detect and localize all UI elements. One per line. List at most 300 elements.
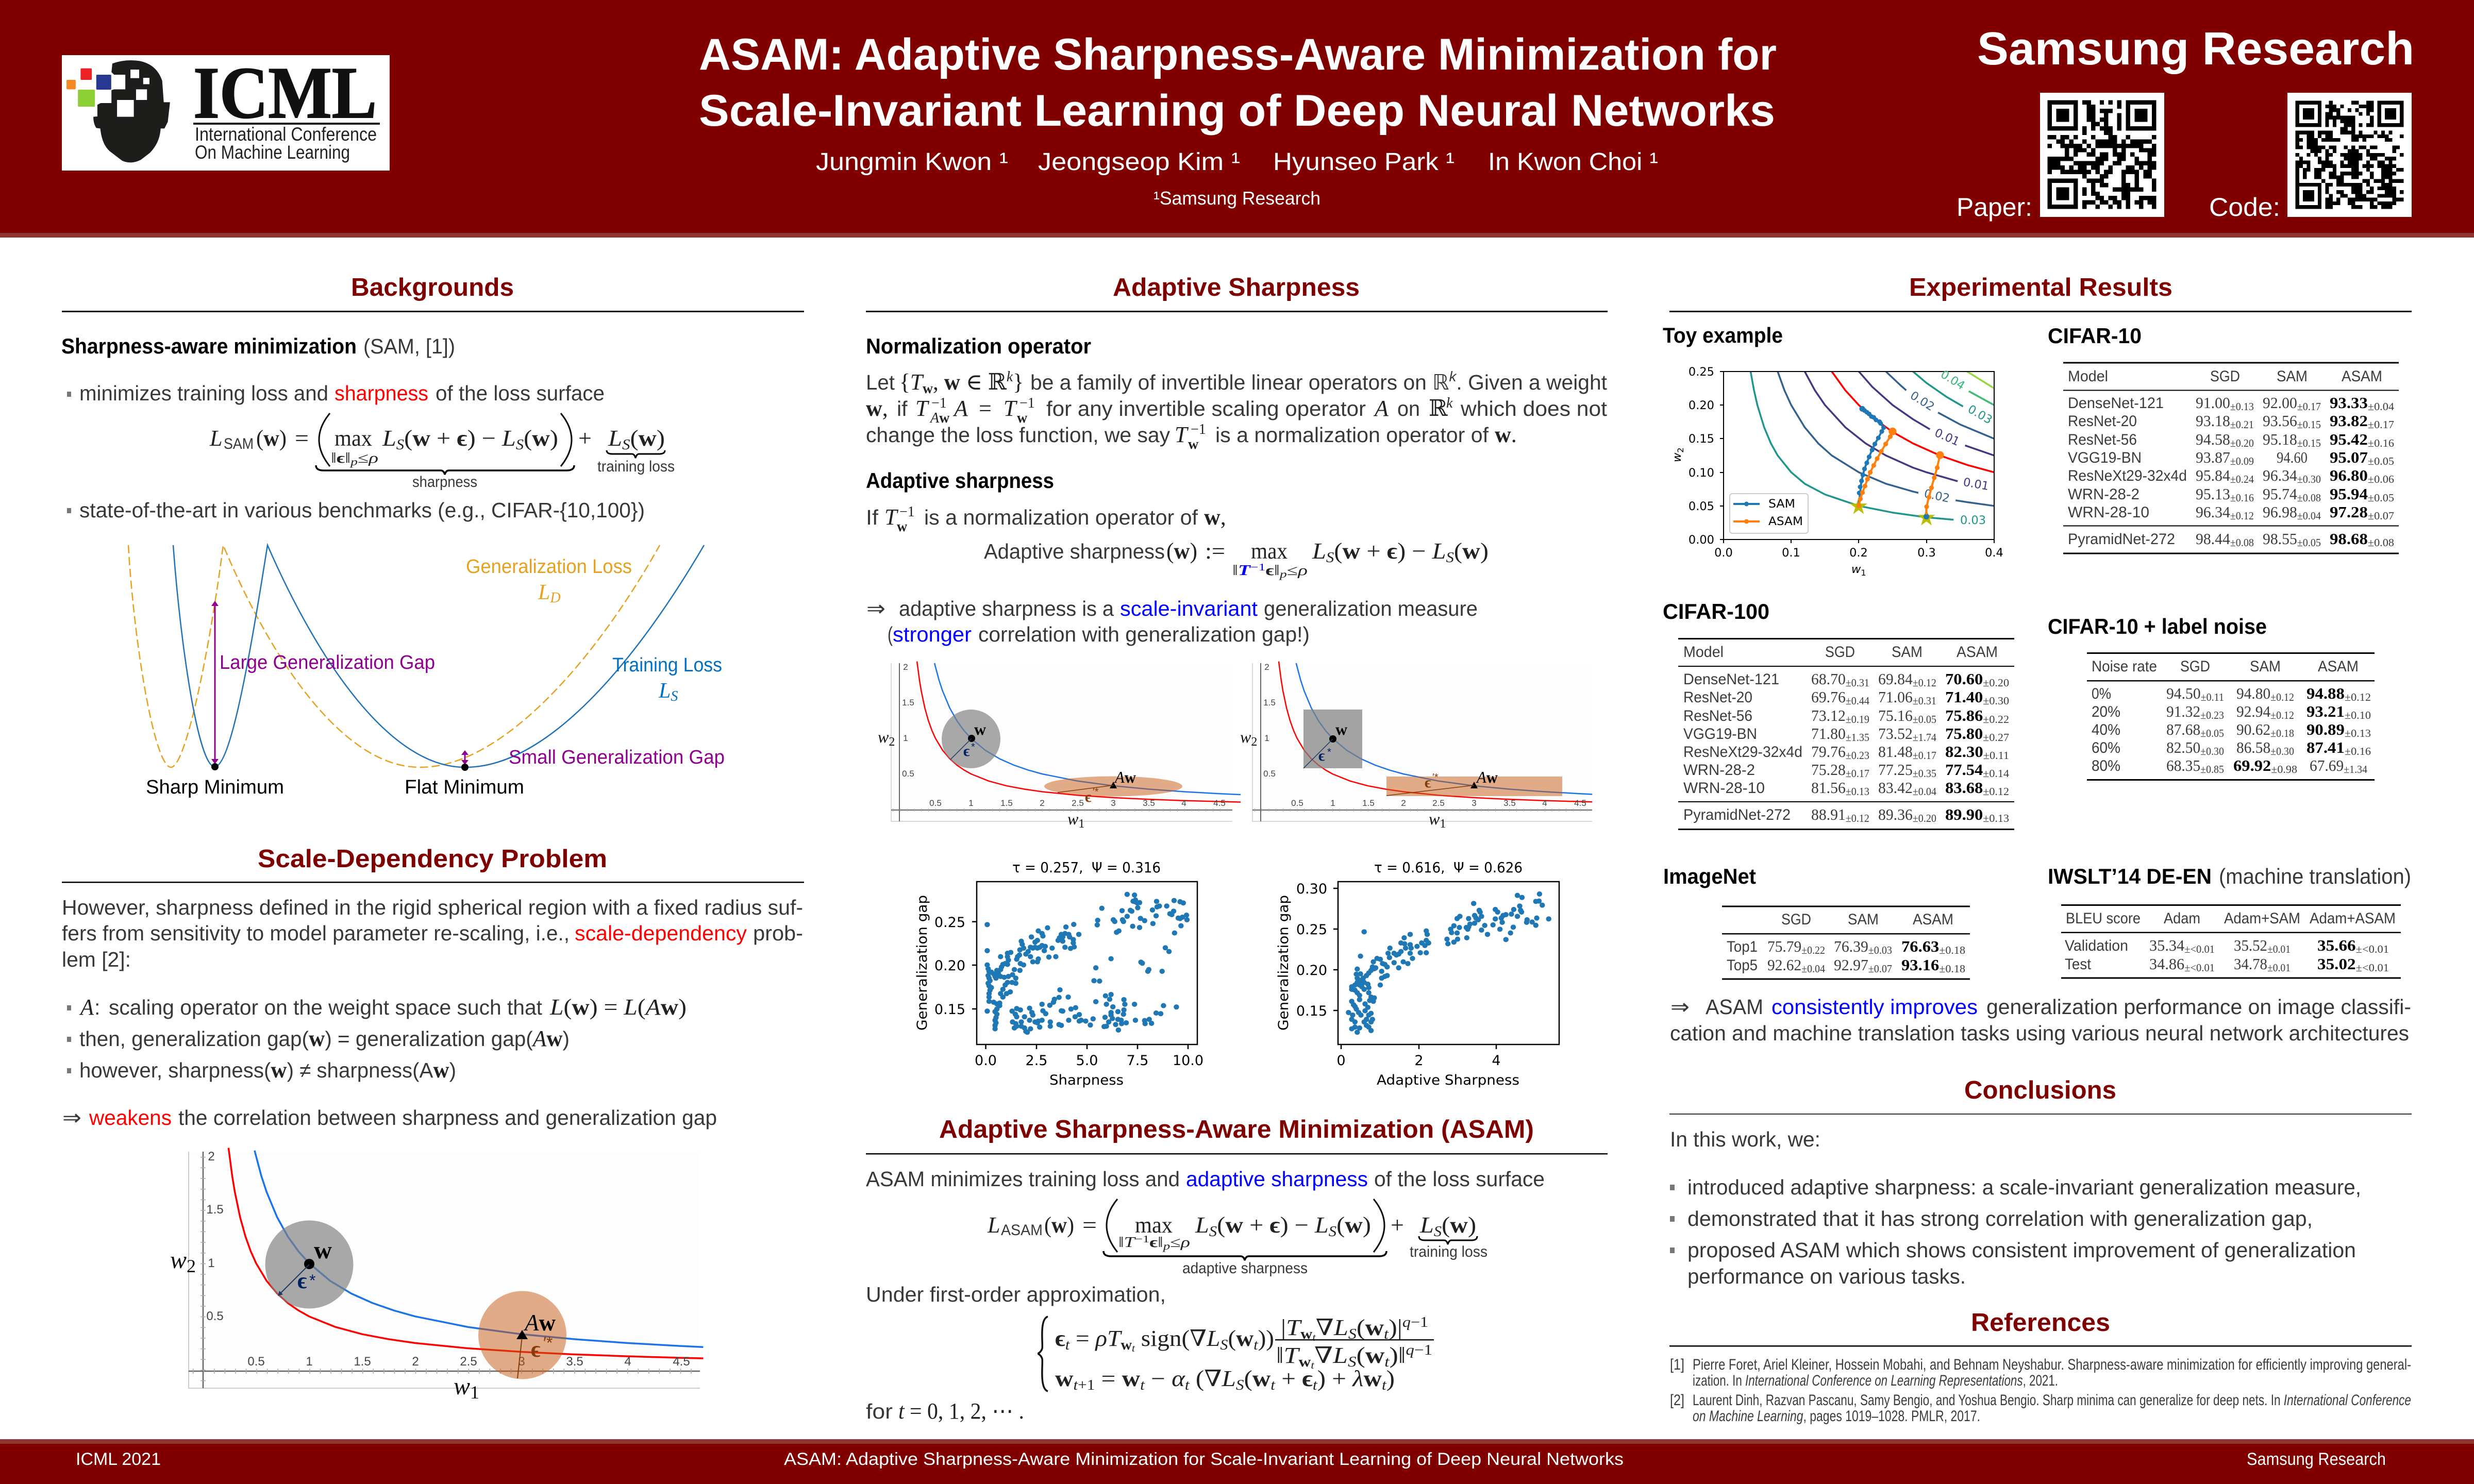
table: ImageNet [1722, 906, 1970, 980]
table: CIFAR-10 label noise: ASAM [2318, 658, 2359, 675]
bullet: minimizes: sharpness [335, 381, 428, 405]
formula: adaptive sharpness: (w) [1166, 538, 1197, 564]
chart: spherical region on weight space: w [1067, 810, 1078, 828]
formula: adaptive sharpness: p [1278, 569, 1287, 580]
text block: adaptive sharpness definition: is a normalization operator of [924, 505, 1198, 529]
formula: ASAM update rules: t [1312, 1332, 1316, 1343]
table: IWSLT'14 DE-EN: ±<0.01 [2184, 962, 2215, 974]
formula: ASAM loss: L [1419, 1212, 1434, 1238]
heading: conclusions: Conclusions [1964, 1076, 2116, 1104]
table: ImageNet: 76.63 [1901, 937, 1937, 955]
table: CIFAR-10: 97.28 [2330, 503, 2366, 521]
table: CIFAR-10 label noise: ±0.16 [2345, 745, 2371, 757]
chart: sharpness regions on weight space: ′* [543, 1334, 553, 1352]
formula: ASAM update rules: t [1384, 1326, 1389, 1342]
table: ImageNet: ±0.18 [1939, 963, 1965, 975]
conclusion: scale-invariant measure [866, 597, 1478, 646]
chart: rectangular region on weight space: 4.5 [1574, 798, 1586, 808]
table: CIFAR-10: ±0.30 [2297, 473, 2321, 485]
chart: sharp vs flat minimum loss curves: L [538, 581, 550, 604]
table: CIFAR-10 label noise: 87.68 [2166, 720, 2202, 738]
table: CIFAR-10 label noise: ±0.11 [2201, 691, 2224, 703]
table: CIFAR-10: ±0.09 [2230, 455, 2254, 467]
bullet: minimizes [67, 381, 605, 405]
chart: sharpness vs generalization gap scatter: 0.15 [934, 1002, 965, 1018]
table: CIFAR-10: ±0.08 [2368, 536, 2394, 549]
table: CIFAR-10 label noise: ±0.12 [2270, 709, 2294, 721]
table: CIFAR-10 label noise: 92.94 [2236, 702, 2272, 720]
formula: ASAM update rules: = [1095, 1366, 1122, 1391]
formula: ASAM update rules: ( [1228, 1326, 1236, 1351]
formula: ASAM update rules: −1 [1411, 1314, 1428, 1330]
conclusion: consistently improves: consistently improves [1771, 995, 1978, 1019]
formula: ASAM update rules: t [1140, 1377, 1145, 1393]
table: IWSLT'14 DE-EN: 35.66 [2317, 936, 2353, 954]
chart: spherical region on weight space: 2 [1040, 798, 1045, 808]
formula: ASAM update rules: S [1348, 1326, 1357, 1342]
table: CIFAR-10 label noise: 40% [2092, 721, 2120, 738]
chart: rectangular region on weight space: 0.5 [1291, 798, 1303, 808]
table: CIFAR-100: 83.42 [1878, 779, 1914, 797]
formula: ASAM update rules: t [1311, 1360, 1314, 1371]
chart: adaptive sharpness vs generalization gap scatter: Adaptive Sharpness [1377, 1072, 1519, 1088]
formula: ASAM loss: S [1209, 1224, 1217, 1240]
chart: spherical region on weight space: Aw [1114, 768, 1136, 786]
table: CIFAR-10: SGD [2210, 368, 2240, 385]
text block: normalization operator definition: if [897, 397, 908, 420]
table: CIFAR-100: ±0.17 [1913, 749, 1936, 762]
table: ImageNet: ASAM [1913, 911, 1953, 928]
table: CIFAR-100: 71.80 [1811, 724, 1847, 743]
table: CIFAR-10: ±0.13 [2230, 400, 2254, 413]
table: CIFAR-10 label noise: Noise rate [2092, 658, 2157, 675]
reference 2 [1670, 1392, 2411, 1425]
table: CIFAR-10 label noise: 90.62 [2236, 720, 2272, 738]
formula: ASAM update rules: S [1220, 1337, 1228, 1353]
table: ImageNet: ±0.03 [1868, 944, 1892, 956]
chart: sharpness regions on weight space: 2.5 [460, 1355, 477, 1369]
chart: sharp vs flat minimum loss curves: Flat Minimum [405, 777, 524, 798]
authors: Hyunseo Park ¹ [1273, 148, 1455, 176]
table: CIFAR-100: ±0.31 [1913, 695, 1936, 707]
formula: ASAM loss: −1 [1135, 1234, 1149, 1245]
chart: sharpness vs generalization gap scatter: 7.5 [1127, 1053, 1148, 1069]
formula: SAM loss: max [335, 426, 372, 451]
formula: ASAM update rules: ϵ [1055, 1326, 1065, 1351]
table: CIFAR-100: ResNet-20 [1683, 689, 1752, 706]
chart: adaptive sharpness vs generalization gap scatter: 0.15 [1296, 1003, 1327, 1019]
formula: SAM loss: L [608, 426, 622, 451]
chart: rectangular region on weight space: 2 [1401, 798, 1406, 808]
text block: adaptive sharpness definition: −1 [899, 504, 915, 520]
text block: normalization operator definition [866, 368, 1608, 452]
table: CIFAR-100 [1678, 638, 2014, 830]
table: CIFAR-10: ±0.21 [2230, 418, 2254, 431]
table: CIFAR-10: ±0.15 [2297, 437, 2321, 449]
text block: normalization operator definition: which does not [1460, 397, 1608, 420]
table: CIFAR-10: 93.56 [2263, 412, 2299, 430]
text block: scale dependency description: fers from sensitivity to model parameter re-scaling, i.e., [62, 921, 570, 945]
formula: ASAM update rules: t [1065, 1337, 1071, 1353]
chart: rectangular region on weight space: 1 [1440, 817, 1446, 831]
chart: toy example contour plot: ASAM [1768, 515, 1803, 528]
subheading: CIFAR-10: CIFAR-10 [2048, 324, 2142, 348]
formula: ASAM update rules: L [1332, 1343, 1348, 1368]
chart: sharpness vs generalization gap scatter [914, 859, 1203, 1088]
formula: ASAM loss [987, 1199, 1487, 1277]
text block: adaptive sharpness definition: T [884, 504, 899, 530]
table: CIFAR-10: ±0.05 [2368, 492, 2394, 504]
table: CIFAR-100: 69.76 [1811, 688, 1847, 706]
table: CIFAR-10: 95.74 [2263, 485, 2299, 503]
chart: spherical region on weight space: ϵ [1085, 788, 1092, 805]
table: IWSLT'14 DE-EN: Test [2065, 956, 2092, 973]
footer banner [0, 1439, 2474, 1484]
formula: ASAM update rules: ρT [1094, 1326, 1123, 1351]
text block: normalization operator definition: −1 [1019, 395, 1035, 411]
table: CIFAR-100: ±0.17 [1846, 767, 1869, 780]
formula: SAM loss: training loss [597, 458, 675, 475]
chart: toy example contour plot: 0.15 [1689, 432, 1714, 446]
formula: ASAM update rules: +1 [1078, 1377, 1095, 1393]
chart: rectangular region on weight space: * [1327, 747, 1331, 758]
table: CIFAR-100: 71.40 [1945, 688, 1981, 706]
table: CIFAR-100: Model [1683, 644, 1724, 661]
chart: toy example contour plot: 1 [1861, 568, 1866, 578]
conclusion: scale-invariant measure: scale-invariant [1120, 597, 1258, 620]
bullet: minimizes: of the loss surface [436, 381, 605, 405]
subheading: CIFAR-100: CIFAR-100 [1663, 599, 1769, 623]
formula: ASAM loss: w + ϵ) − L [1225, 1212, 1327, 1238]
table: IWSLT'14 DE-EN: Validation [2065, 937, 2128, 954]
formula: ASAM update rules: t [1271, 1377, 1276, 1393]
chart: sharpness vs generalization gap scatter: 0.20 [934, 958, 965, 974]
formula: adaptive sharpness: w) [1462, 538, 1488, 564]
table: CIFAR-100: 79.76 [1811, 743, 1847, 761]
chart: sharpness regions on weight space: 2 [208, 1150, 215, 1163]
chart: spherical region on weight space: 3 [1111, 798, 1116, 808]
table: CIFAR-10: ±0.05 [2368, 455, 2394, 467]
formula: ASAM update rules: )) [1258, 1326, 1274, 1351]
table: CIFAR-10: ±0.08 [2230, 536, 2254, 549]
formula: SAM loss: ( [404, 426, 412, 451]
conclusion: scale-invariant measure: ⇒ [866, 597, 885, 620]
text block: normalization operator definition: } [1013, 369, 1024, 395]
footer banner: ICML 2021 [76, 1449, 161, 1469]
footer banner: Samsung Research [2247, 1449, 2386, 1469]
bullet list: conclusions: proposed ASAM which shows consistent improvement of generalization [1687, 1238, 2356, 1262]
table: CIFAR-100: ±0.13 [1846, 785, 1869, 798]
formula: ASAM update rules: ) [1386, 1366, 1395, 1391]
formula: SAM loss: ‖ϵ‖ [331, 450, 349, 466]
table: CIFAR-10: ±0.24 [2230, 473, 2254, 485]
heading: ASAM: Adaptive Sharpness-Aware Minimization (ASAM) [939, 1116, 1534, 1143]
subheading: IWSLT'14 DE-EN: IWSLT’14 DE-EN [2048, 864, 2212, 888]
chart: spherical region on weight space: 2 [903, 662, 908, 672]
bullet list: scaling operator: A [79, 994, 94, 1020]
chart: toy example contour plot: 0.20 [1689, 399, 1714, 412]
subheading: CIFAR-10 label noise: CIFAR-10 + label noise [2048, 614, 2267, 638]
chart: adaptive sharpness vs generalization gap scatter: 0 [1336, 1053, 1346, 1069]
chart: sharpness regions on weight space: ϵ [531, 1337, 541, 1362]
chart: sharpness vs generalization gap scatter: 0.25 [934, 915, 965, 931]
formula: ASAM loss: adaptive sharpness [1182, 1260, 1308, 1277]
table: CIFAR-100: 73.52 [1878, 724, 1914, 743]
chart: sharpness regions on weight space: Aw [523, 1309, 556, 1336]
formula: ASAM update rules: + [1275, 1366, 1302, 1391]
table: CIFAR-10: 98.68 [2330, 530, 2366, 548]
chart: spherical region on weight space: 4 [1181, 798, 1186, 808]
table: CIFAR-100: 83.68 [1945, 779, 1981, 797]
reference 1: ization. In International Conference on Learning Representations, 2021. [1693, 1372, 2058, 1389]
table: CIFAR-100: 71.06 [1878, 688, 1914, 706]
table: CIFAR-10 label noise: ±0.30 [2270, 745, 2294, 757]
bullet: minimizes: minimizes training loss and [79, 381, 328, 405]
formula: ASAM update rules: L [1206, 1326, 1220, 1351]
formula: adaptive sharpness: w + ϵ) − L [1342, 538, 1445, 564]
chart: adaptive sharpness vs generalization gap scatter: 0.25 [1296, 922, 1327, 938]
chart: spherical region on weight space: 1 [968, 798, 974, 808]
formula: adaptive sharpness: ( [1334, 538, 1342, 564]
chart: adaptive sharpness vs generalization gap scatter: 4 [1492, 1053, 1501, 1069]
formula: adaptive sharpness: ≤ [1287, 563, 1298, 579]
chart: toy example contour plot: 0.02 [1923, 487, 1951, 505]
subheading: normalization operator: Normalization operator [866, 334, 1091, 358]
formula: adaptive sharpness: := [1205, 538, 1225, 564]
table: ImageNet: Top1 [1727, 938, 1758, 955]
chart: sharp vs flat minimum loss curves: Small Generalization Gap [509, 747, 725, 768]
table: CIFAR-100: 70.60 [1945, 670, 1981, 688]
formula: ASAM update rules: t [1073, 1377, 1079, 1393]
table: CIFAR-100: ±0.13 [1983, 812, 2009, 824]
formula: ASAM loss: ( [1217, 1212, 1225, 1238]
text block: normalization operator definition: k [1007, 369, 1013, 385]
formula: SAM loss: L [382, 426, 396, 451]
table: CIFAR-10 label noise: 90.89 [2306, 720, 2343, 738]
text block: normalization operator definition: T [915, 396, 930, 421]
chart: spherical region on weight space: * [971, 741, 975, 753]
table: ImageNet: 76.39 [1834, 937, 1870, 955]
table: CIFAR-10: SAM [2277, 368, 2308, 385]
chart: sharpness regions on weight space: 4.5 [673, 1355, 690, 1369]
text block: normalization operator definition: A [952, 396, 968, 421]
table: CIFAR-10 label noise: ±0.12 [2270, 691, 2294, 703]
formula: SAM loss: S [516, 437, 524, 453]
panel: conclusions [1669, 1076, 2412, 1288]
table: CIFAR-10 label noise: ±0.18 [2270, 727, 2294, 739]
chart: toy example contour plot: 2 [1676, 447, 1685, 453]
chart: toy example contour plot: w [1851, 563, 1861, 576]
table: CIFAR-100: ResNet-56 [1683, 707, 1752, 724]
chart: spherical region on weight space: 3.5 [1143, 798, 1155, 808]
heading: experimental results: Experimental Results [1909, 274, 2172, 301]
text block: normalization operator definition: on [1397, 397, 1420, 420]
table: CIFAR-100: ±0.23 [1846, 749, 1869, 762]
text block: normalization operator definition: ℝ [1429, 396, 1448, 421]
table: CIFAR-10 label noise: ±0.98 [2271, 763, 2297, 775]
table: CIFAR-10 label noise: ±0.85 [2200, 763, 2224, 775]
table: IWSLT'14 DE-EN: Adam+ASAM [2310, 910, 2396, 927]
table: CIFAR-100: 75.28 [1811, 761, 1847, 779]
table: CIFAR-10: 91.00 [2196, 394, 2232, 412]
table: CIFAR-10: DenseNet-121 [2068, 395, 2164, 412]
table: CIFAR-100: SGD [1825, 644, 1855, 661]
table: CIFAR-10 label noise: SAM [2250, 658, 2281, 675]
table: CIFAR-10: 95.84 [2196, 466, 2232, 484]
chart: sharp vs flat minimum loss curves: Training Loss [612, 654, 722, 676]
chart: toy example contour plot: 0.04 [1938, 368, 1967, 393]
formula: SAM loss: L [209, 426, 222, 451]
chart: sharpness regions on weight space: 4 [624, 1355, 631, 1369]
text block: normalization operator definition: for any invertible scaling operator [1046, 397, 1366, 420]
table: CIFAR-100: ±0.20 [1913, 812, 1936, 824]
formula: SAM loss: S [622, 437, 630, 453]
formula: ASAM update rules: ( [1244, 1366, 1252, 1391]
table: CIFAR-10: ±0.08 [2297, 492, 2321, 504]
chart: rectangular region on weight space: 1.5 [1362, 798, 1375, 808]
chart: sharpness regions on weight space: 1.5 [206, 1203, 224, 1217]
chart: sharp vs flat minimum loss curves: L [659, 679, 671, 703]
table: IWSLT'14 DE-EN: 34.78 [2234, 955, 2270, 973]
formula: adaptive sharpness: max [1251, 538, 1288, 564]
chart: spherical region on weight space: 0.5 [929, 798, 942, 808]
text block: in this work: In this work, we: [1670, 1127, 1820, 1151]
formula: ASAM update rules: ) + [1317, 1366, 1352, 1391]
table: CIFAR-100: 75.16 [1878, 706, 1914, 724]
text block: normalization operator definition: w [923, 381, 933, 397]
formula: SAM loss: SAM [224, 435, 254, 452]
formula: ASAM update rules: w [1236, 1326, 1253, 1351]
chart: rectangular region on weight space: 1 [1264, 733, 1269, 743]
chart: rectangular region on weight space: w [1240, 728, 1251, 746]
table: ImageNet: ±0.07 [1868, 963, 1892, 975]
subheading: toy example: Toy example [1663, 323, 1783, 347]
text block: ASAM description [866, 1167, 1545, 1191]
table: CIFAR-100: ResNeXt29-32x4d [1683, 744, 1802, 761]
conclusion: consistently improves: generalization performance on image classifi- [1986, 995, 2411, 1019]
table: CIFAR-10: ±0.04 [2368, 400, 2395, 413]
formula: ASAM update rules: = [1069, 1326, 1095, 1351]
formula: ASAM loss: ( [1442, 1212, 1450, 1238]
chart: spherical region on weight space: 2.5 [1072, 798, 1084, 808]
chart: rectangular region on weight space: 1 [1330, 798, 1335, 808]
table: CIFAR-100: 68.70 [1811, 670, 1847, 688]
formula: SAM loss: ( [524, 426, 532, 451]
text block: normalization operator definition: w. [1495, 422, 1517, 447]
table: CIFAR-10: ResNet-56 [2068, 431, 2137, 448]
formula: ASAM update rules: (∇ [1190, 1366, 1222, 1391]
formula: ASAM update rules: t [1132, 1343, 1135, 1354]
heading: adaptive sharpness [866, 274, 1608, 312]
table: CIFAR-10 label noise: ±0.23 [2200, 709, 2224, 721]
formula: ASAM update rules: w [1365, 1343, 1385, 1368]
formula: adaptive sharpness: ρ [1297, 563, 1308, 579]
formula: ASAM update rules: L [1221, 1366, 1236, 1391]
table: CIFAR-10: ±0.17 [2368, 418, 2394, 431]
formula: ASAM loss: ‖ [1158, 1235, 1162, 1251]
text block: normalization operator definition: w [1017, 410, 1028, 426]
text block: normalization operator definition: Let [866, 370, 895, 394]
table: CIFAR-10: 94.60 [2277, 448, 2308, 466]
chart: spherical region on weight space: ′* [1093, 786, 1099, 798]
table: CIFAR-10: 92.00 [2263, 394, 2299, 412]
table: CIFAR-100: ±0.14 [1983, 767, 2010, 780]
bullet list: conclusions: performance on various tasks. [1687, 1264, 1966, 1288]
formula: ASAM loss: S [1434, 1224, 1442, 1240]
icon: ICML logo: International Conference [195, 124, 377, 145]
chart: sharpness vs generalization gap scatter: 2.5 [1026, 1053, 1047, 1069]
formula: ASAM update rules: − [1145, 1366, 1172, 1391]
chart: toy example contour plot: 0.4 [1985, 546, 2003, 560]
formula: adaptive sharpness: L [1312, 538, 1326, 564]
chart: toy example contour plot: 0.01 [1932, 426, 1962, 449]
subheading: IWSLT'14 DE-EN: (machine translation) [2219, 864, 2411, 888]
subheading: ImageNet: ImageNet [1663, 864, 1756, 888]
table: IWSLT'14 DE-EN: ±0.01 [2267, 962, 2291, 974]
bullet list: scaling operator: however, sharpness(w) ≠ sharpness(Aw) [79, 1057, 456, 1083]
table: CIFAR-100: WRN-28-2 [1683, 762, 1755, 779]
table: CIFAR-100: ASAM [1957, 644, 1998, 661]
formula: ASAM update rules: t [1185, 1377, 1190, 1393]
table: CIFAR-10 label noise: 67.69 [2310, 756, 2346, 774]
table: CIFAR-100: WRN-28-10 [1683, 780, 1765, 797]
chart: adaptive sharpness vs generalization gap scatter: τ = 0.616, Ψ = 0.626 [1374, 859, 1523, 876]
formula: adaptive sharpness [984, 538, 1489, 580]
table: ImageNet: ±0.22 [1801, 944, 1825, 956]
formula: ASAM update rules: q [1402, 1314, 1411, 1330]
chart: sharpness regions on weight space: ϵ [297, 1268, 307, 1293]
chart: toy example contour plot: 0.3 [1917, 546, 1936, 560]
table: IWSLT'14 DE-EN: 35.02 [2317, 955, 2353, 973]
chart: rectangular region on weight space: ϵ [1425, 774, 1431, 791]
text block: normalization operator definition: change the loss function, we say [866, 423, 1170, 447]
chart: sharp vs flat minimum loss curves: Large Generalization Gap [220, 652, 435, 673]
chart: sharpness regions on weight space: 1 [306, 1355, 313, 1369]
formula: ASAM loss: L [1195, 1212, 1209, 1238]
chart: sharpness regions on weight space: w [170, 1246, 187, 1274]
chart: sharpness regions on weight space: 1.5 [354, 1355, 371, 1369]
formula: ASAM update rules: w [1252, 1366, 1271, 1391]
text block: normalization operator definition: T [1175, 422, 1189, 447]
formula: ASAM loss: ( [1336, 1212, 1345, 1238]
text block: normalization operator definition: is a normalization operator of [1215, 423, 1489, 447]
table: CIFAR-100: 75.86 [1945, 706, 1981, 724]
formula: ASAM loss: ρ [1180, 1235, 1190, 1251]
table: CIFAR-10 label noise: SGD [2180, 658, 2210, 675]
chart: toy example contour plot: 0.25 [1689, 365, 1714, 379]
chart: rectangular region on weight space: 2.5 [1432, 798, 1445, 808]
formula: ASAM update rules: )‖ [1389, 1343, 1406, 1368]
table: IWSLT'14 DE-EN: BLEU score [2066, 910, 2141, 927]
authors: Jungmin Kwon ¹ [816, 148, 1008, 176]
chart: sharpness vs generalization gap scatter: 5.0 [1076, 1053, 1098, 1069]
chart: rectangular region on weight space: ′* [1432, 772, 1439, 783]
text block: scale dependency description [62, 896, 803, 971]
conclusion: scale-invariant measure: correlation with generalization gap!) [978, 622, 1310, 646]
bullet list: conclusions: introduced adaptive sharpness: a scale-invariant generalization measure, [1687, 1175, 2361, 1199]
text block: normalization operator definition: A [1373, 396, 1389, 421]
chart: sharpness regions on weight space: 2 [412, 1355, 419, 1369]
formula: SAM loss: w + ϵ) − L [412, 426, 514, 451]
table: CIFAR-10 label noise: 94.88 [2306, 684, 2343, 702]
formula: SAM loss: (w) [256, 426, 287, 451]
formula: ASAM update rules: w [1122, 1366, 1140, 1391]
header banner [0, 0, 2474, 238]
icon: code QR code [2287, 93, 2412, 217]
title: ASAM: Adaptive Sharpness-Aware Minimization for [699, 30, 1777, 79]
table: CIFAR-10: 98.44 [2196, 530, 2232, 548]
table: CIFAR-100: 82.30 [1945, 743, 1981, 761]
